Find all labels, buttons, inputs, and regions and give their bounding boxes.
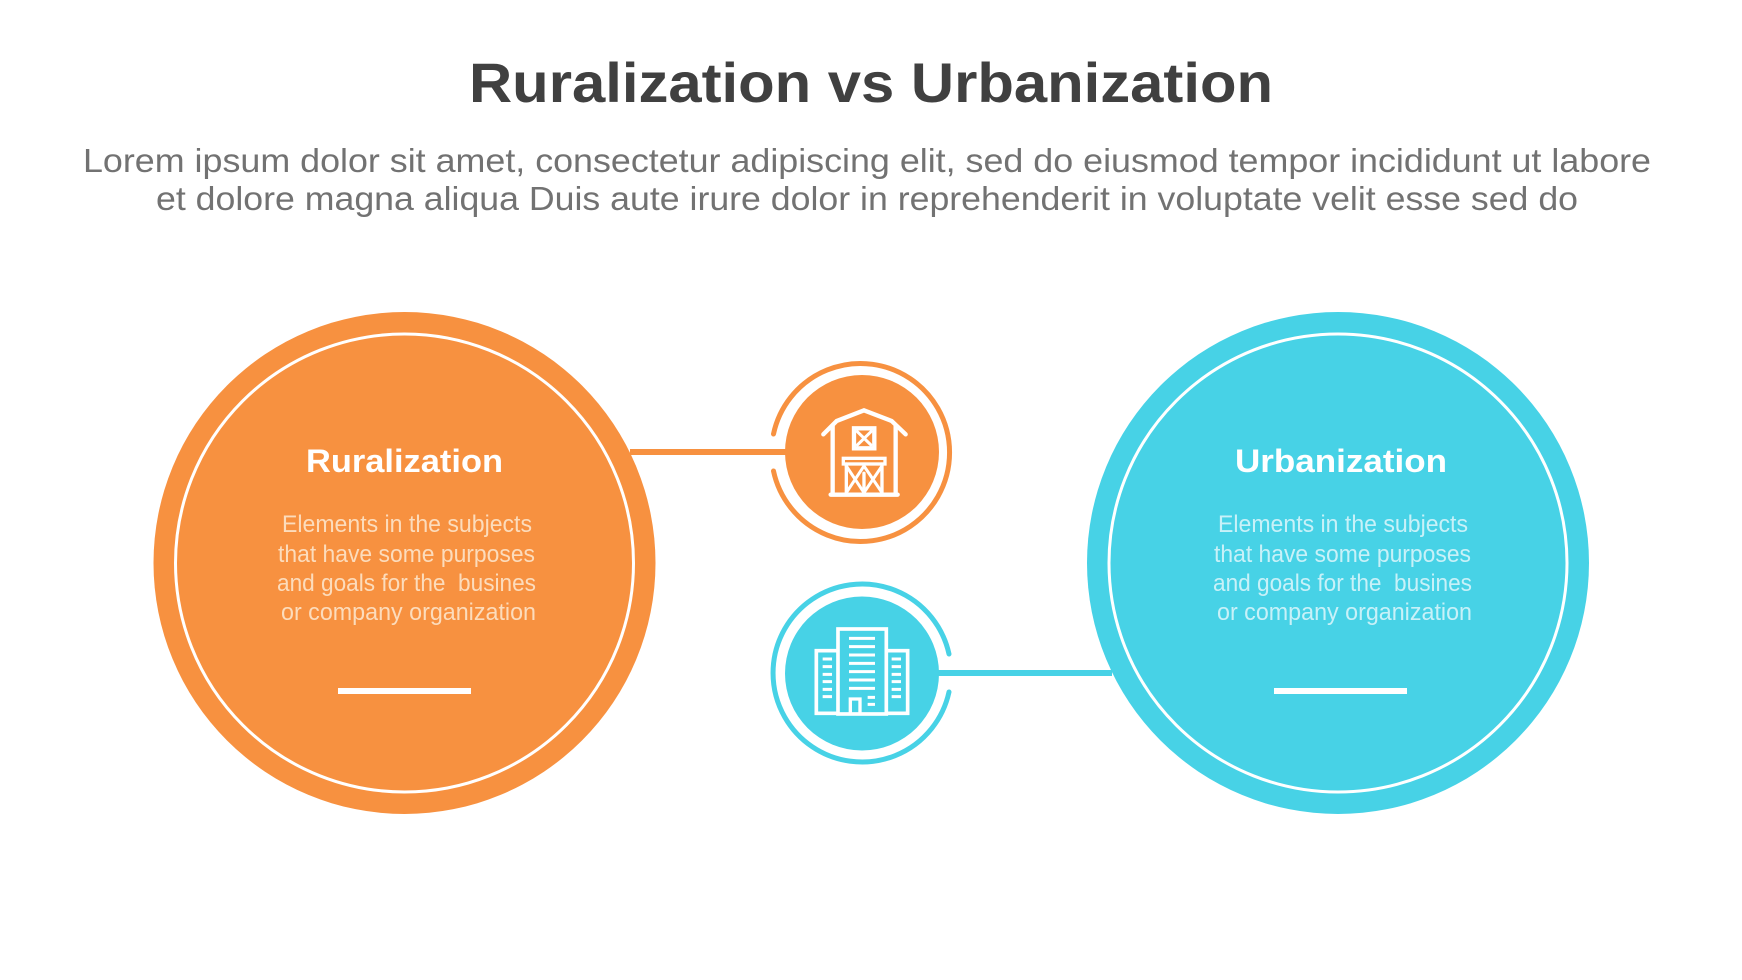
body text: ruralization: that have some purposes: [278, 541, 535, 568]
body text: urbanization: Elements in the subjects: [1218, 511, 1468, 538]
body text: urbanization: or company organization: [1217, 599, 1472, 626]
large blue circle: [1087, 312, 1589, 814]
icon: buildings: [816, 629, 908, 714]
subtitle text block: [83, 142, 1651, 217]
body text: ruralization: [277, 511, 536, 626]
white inner ring: [1109, 334, 1567, 792]
panel: ruralization: [154, 312, 656, 814]
open ring: barn badge: [774, 363, 950, 541]
icon badge: barn: [774, 363, 950, 541]
panel: urbanization: [1087, 312, 1589, 814]
body text: urbanization: that have some purposes: [1214, 541, 1471, 568]
icon: barn: [823, 410, 906, 495]
open ring: buildings badge: [773, 584, 949, 762]
title: Ruralization vs Urbanization: [469, 51, 1273, 114]
icon badge: buildings: [773, 584, 949, 762]
body text: ruralization: and goals for the busines: [277, 570, 536, 597]
large orange circle: [154, 312, 656, 814]
body text: ruralization: Elements in the subjects: [282, 511, 532, 538]
connector: ruralization line: [630, 449, 790, 455]
subtitle text block: Lorem ipsum dolor sit amet, consectetur adipiscing elit, sed do eiusmod tempor incididunt ut labore: [83, 142, 1651, 179]
divider bar: [338, 688, 471, 694]
divider bar: [1274, 688, 1407, 694]
filled disc: buildings badge: [785, 596, 939, 750]
body text: urbanization: and goals for the busines: [1213, 570, 1472, 597]
connector: urbanization line: [935, 670, 1112, 676]
body text: urbanization: [1213, 511, 1472, 626]
white inner ring: [176, 334, 634, 792]
filled disc: barn badge: [785, 375, 939, 529]
heading: urbanization: Urbanization: [1235, 443, 1447, 479]
subtitle text block: et dolore magna aliqua Duis aute irure dolor in reprehenderit in voluptate velit esse sed do: [156, 180, 1578, 217]
body text: ruralization: or company organization: [281, 599, 536, 626]
heading: ruralization: Ruralization: [306, 443, 503, 479]
